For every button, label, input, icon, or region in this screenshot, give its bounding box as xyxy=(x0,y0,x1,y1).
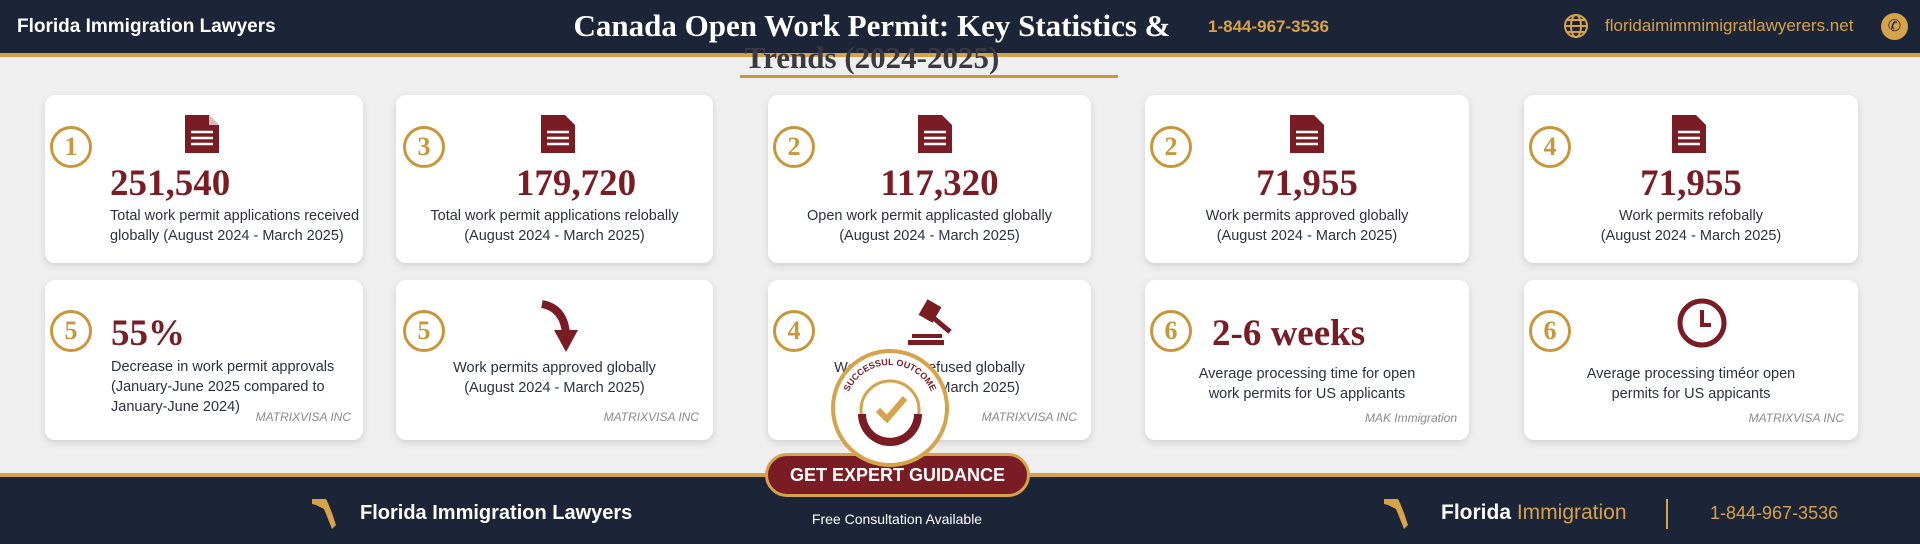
header bar xyxy=(0,0,1920,57)
card 7 xyxy=(396,280,713,440)
source: MATRIXVISA INC xyxy=(1749,411,1844,425)
title: Trends (2024-2025) xyxy=(745,40,999,75)
description xyxy=(110,208,359,244)
CTA button: GET EXPERT GUIDANCE xyxy=(790,465,1005,485)
icon: down arrow xyxy=(541,300,578,352)
description: (August 2024 - March 2025) xyxy=(839,228,1020,244)
description: Work permits approved globally xyxy=(1206,208,1408,224)
description: Decrease in work permit approvals xyxy=(111,359,334,375)
icon: globe xyxy=(1564,14,1588,38)
description: (August 2024 - March 2025) xyxy=(1601,228,1781,244)
badge 1 xyxy=(50,126,92,168)
badge 3: 3 xyxy=(418,132,430,161)
description: permits for US appicants xyxy=(1612,386,1770,402)
footer bar xyxy=(0,473,1920,544)
description: Open work permit applicasted globally xyxy=(807,208,1052,224)
header brand: Florida Immigration Lawyers xyxy=(17,16,276,37)
seal: successful outcome: SUCCESSUL OUTCOME xyxy=(844,358,936,392)
badge 6 xyxy=(1529,310,1571,352)
badge 4: 4 xyxy=(1544,132,1556,161)
badge 6 xyxy=(1150,310,1192,352)
badge 2: 2 xyxy=(1164,132,1178,161)
icon: phone: ✆ xyxy=(1888,18,1901,35)
badge 5: 5 xyxy=(418,316,430,345)
icon: document xyxy=(185,115,219,153)
icon: document xyxy=(541,115,575,153)
footer brand right: Florida Immigration xyxy=(1441,501,1627,524)
value: 71,955 xyxy=(1256,163,1358,204)
description: Work permits approved globally xyxy=(453,360,656,376)
card 2 xyxy=(396,95,713,263)
badge 5 xyxy=(403,310,445,352)
description xyxy=(453,360,656,396)
card 9 xyxy=(1145,280,1469,440)
card 1 xyxy=(45,95,363,263)
icon: document xyxy=(1290,115,1324,153)
badge 4: 4 xyxy=(788,316,800,345)
value: 179,720 xyxy=(516,163,636,204)
footer phone: 1-844-967-3536 xyxy=(1710,503,1838,523)
badge 3 xyxy=(403,126,445,168)
badge 5: 5 xyxy=(64,316,78,345)
badge 6: 6 xyxy=(1164,316,1178,345)
value: 251,540 xyxy=(110,163,230,204)
footer brand left: Florida Immigration Lawyers xyxy=(360,502,632,524)
badge 1: 1 xyxy=(64,132,78,161)
header url: floridaimimmimigratlawyerers.net xyxy=(1605,16,1853,35)
value: 55% xyxy=(111,313,185,354)
description xyxy=(111,359,334,415)
description: Work permits refobally xyxy=(1619,208,1763,224)
card 10 xyxy=(1524,280,1858,440)
divider xyxy=(1666,499,1668,529)
badge 6: 6 xyxy=(1544,316,1556,345)
source: MAK Immigration xyxy=(1365,411,1457,425)
description xyxy=(1206,208,1408,244)
title: Canada Open Work Permit: Key Statistics & xyxy=(573,8,1170,43)
description xyxy=(430,208,679,244)
title underline xyxy=(740,75,1118,78)
source: MATRIXVISA INC xyxy=(256,410,351,424)
description: Average processing timéor open xyxy=(1587,366,1795,382)
badge 2: 2 xyxy=(788,132,800,161)
seal: successful outcome xyxy=(831,349,949,467)
description xyxy=(1586,366,1795,402)
footer consultation: Free Consultation Available xyxy=(812,511,982,527)
value: 117,320 xyxy=(880,163,999,204)
card 3 xyxy=(768,95,1091,263)
value: 71,955 xyxy=(1640,163,1742,204)
description: Average processing time for open xyxy=(1199,366,1415,382)
header phone: 1-844-967-3536 xyxy=(1208,17,1329,36)
card 6 xyxy=(45,280,363,440)
badge 5 xyxy=(50,310,92,352)
description: Total work permit applications relobally xyxy=(430,208,679,224)
icon: clock xyxy=(1678,298,1726,348)
icon: phone xyxy=(1881,13,1908,40)
icon: florida left xyxy=(312,499,336,529)
card 4 xyxy=(1145,95,1469,263)
description xyxy=(834,360,1025,396)
description: January-June 2024) xyxy=(111,399,240,415)
description: (August 2024 - March 2025) xyxy=(464,228,645,244)
description: (January-June 2025 compared to xyxy=(111,379,325,395)
badge 4 xyxy=(1529,126,1571,168)
source: MATRIXVISA INC xyxy=(982,410,1077,424)
description xyxy=(1601,208,1781,244)
CTA button xyxy=(765,453,1030,497)
description: (August 2024 - March 2025) xyxy=(839,380,1020,396)
description: Total work permit applications received xyxy=(110,208,359,224)
card 5 xyxy=(1524,95,1858,263)
icon: gavel xyxy=(908,299,952,345)
badge 2 xyxy=(1150,126,1192,168)
icon: document xyxy=(1672,115,1706,153)
description: globally (August 2024 - March 2025) xyxy=(110,228,344,244)
description xyxy=(807,208,1052,244)
description: (August 2024 - March 2025) xyxy=(464,380,645,396)
source: MATRIXVISA INC xyxy=(604,410,699,424)
icon: florida right xyxy=(1384,499,1408,529)
description: work permits for US applicants xyxy=(1209,386,1405,402)
icon: document xyxy=(918,115,952,153)
title xyxy=(573,8,1170,75)
badge 2 xyxy=(773,126,815,168)
description: (August 2024 - March 2025) xyxy=(1217,228,1397,244)
description: Work permits refused globally xyxy=(834,360,1025,376)
badge 4 xyxy=(773,310,815,352)
value: 2-6 weeks xyxy=(1212,313,1365,354)
card 8 xyxy=(768,280,1091,440)
description xyxy=(1198,366,1415,402)
